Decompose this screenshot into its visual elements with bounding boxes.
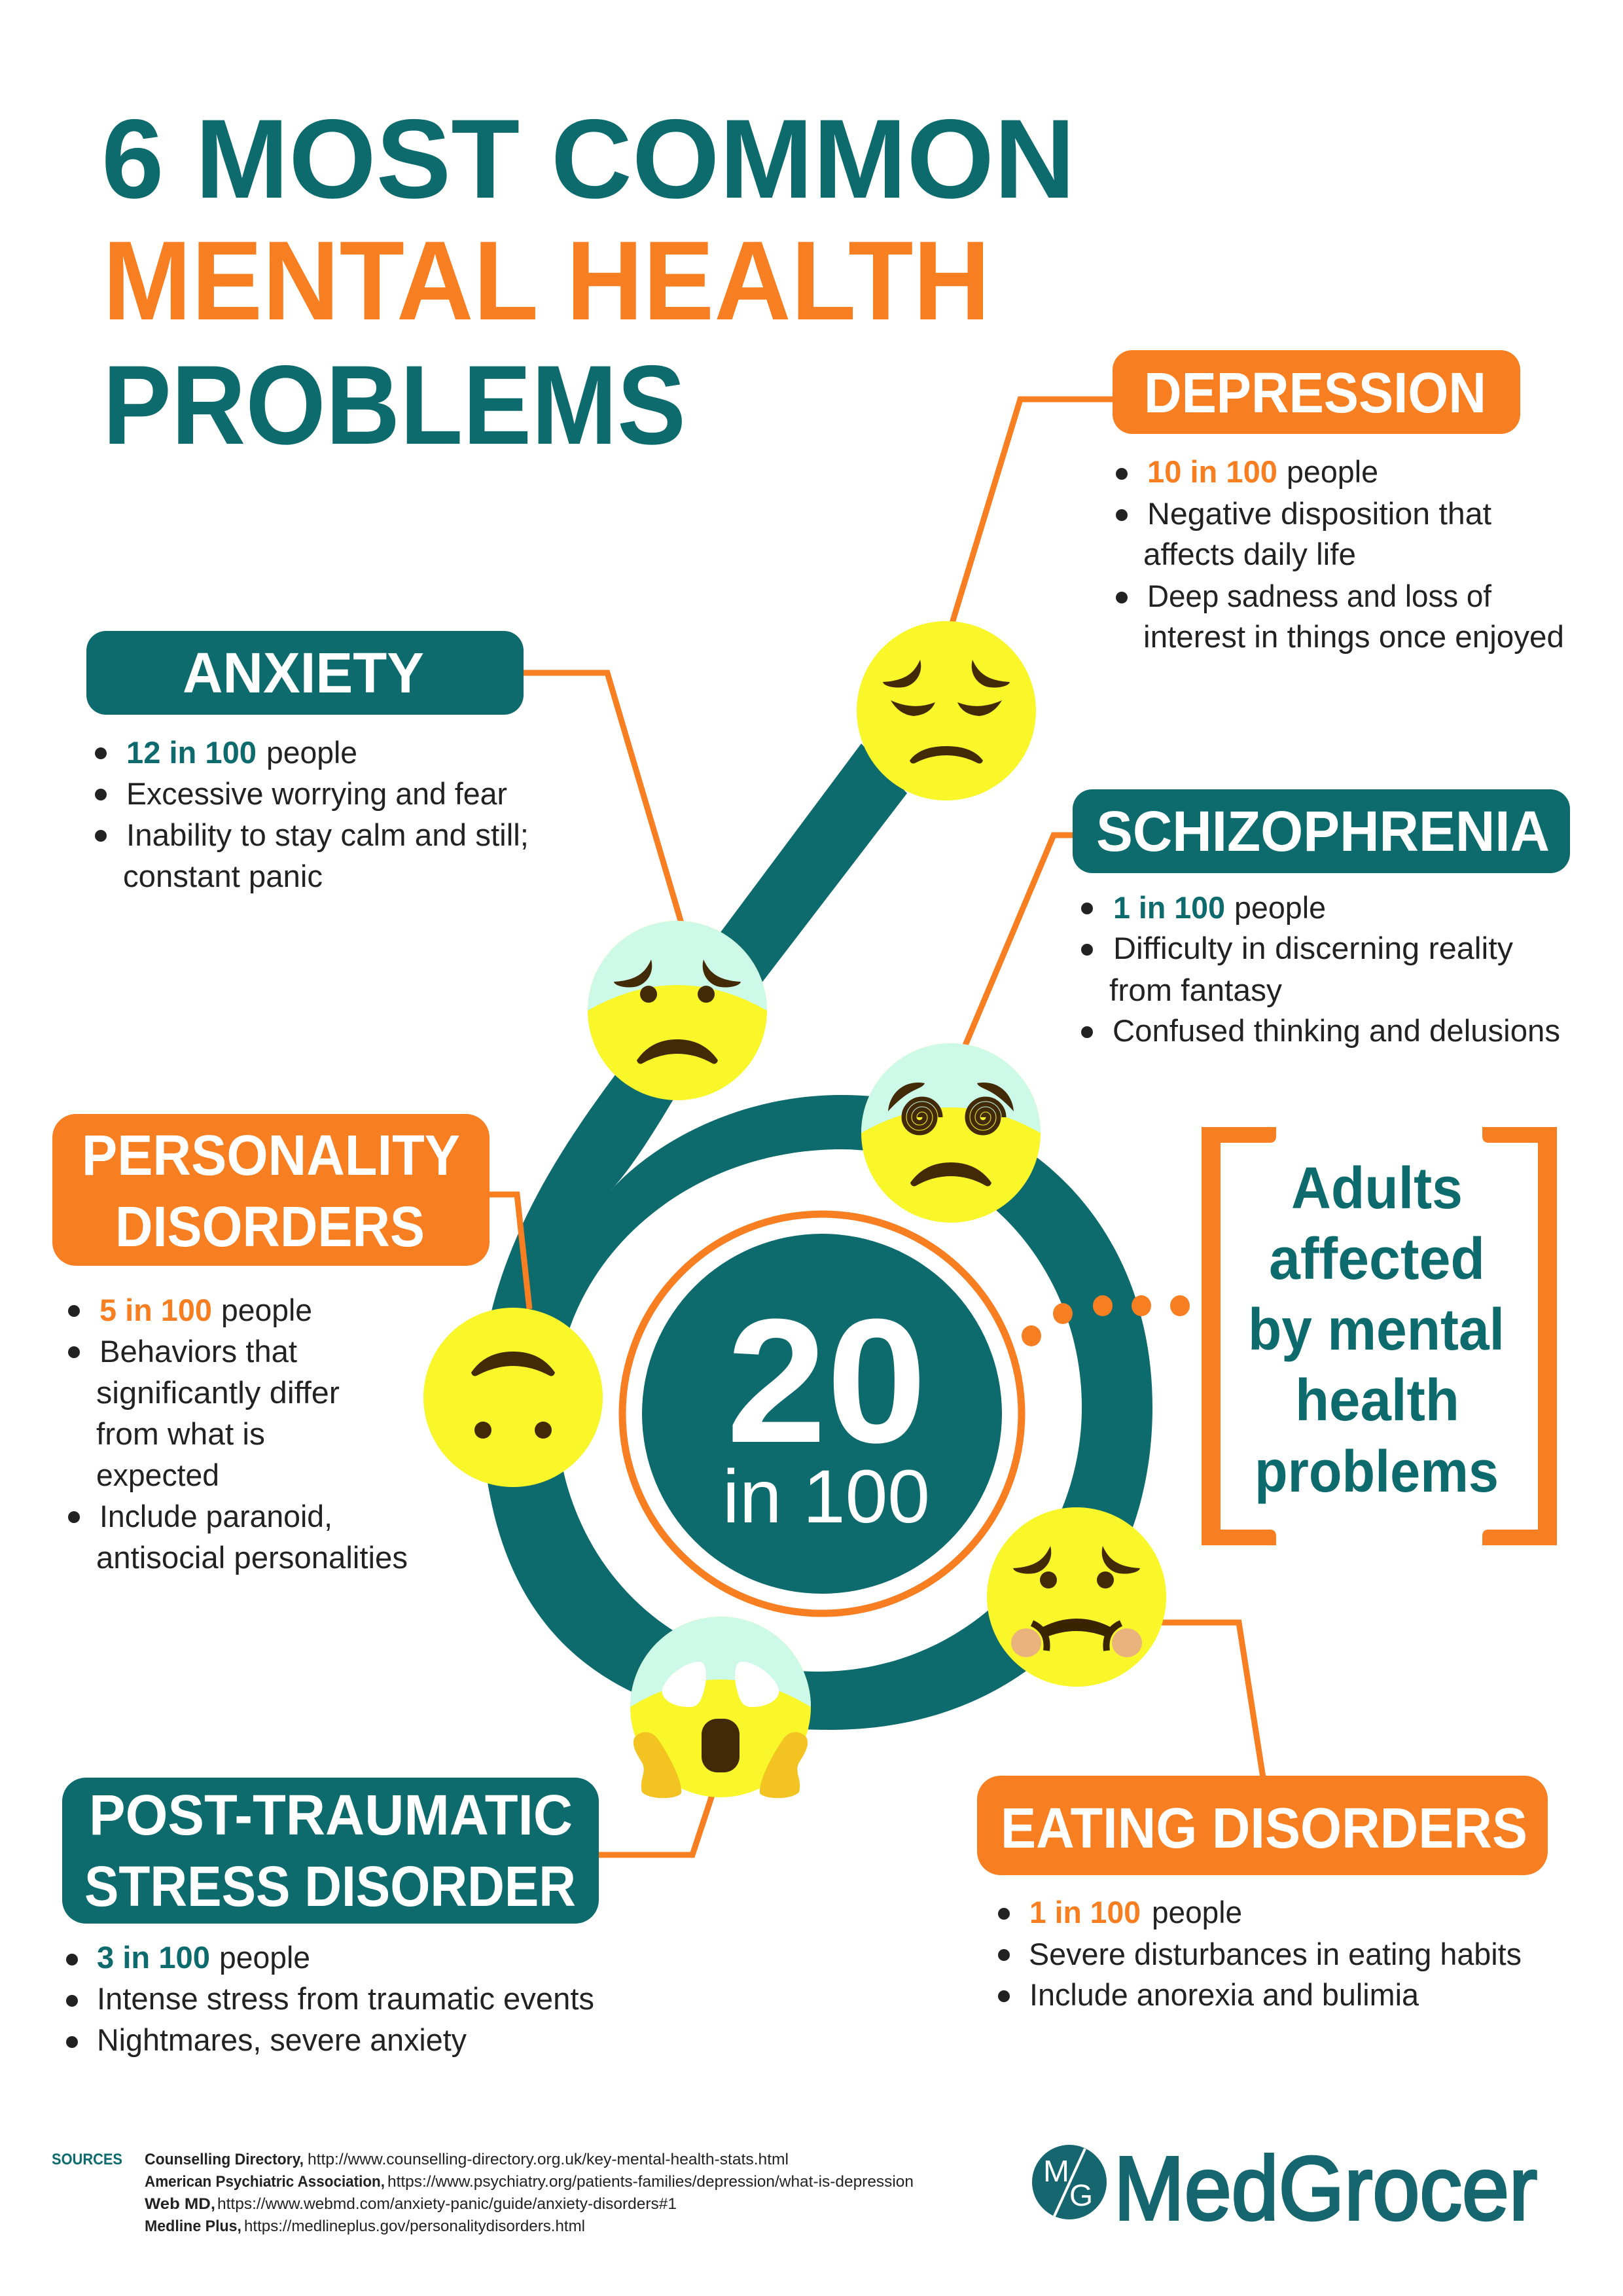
connector: depression: [952, 399, 1119, 625]
sources: American Psychiatric Association,: [145, 2173, 385, 2191]
icon: personality disorders face: [423, 1308, 603, 1487]
text: depression facts: people: [1287, 454, 1378, 489]
text: eating disorders facts: Include anorexia and bulimia: [1029, 1977, 1419, 2012]
icon: post-traumatic stress face: [630, 1617, 811, 1798]
heading: personality disorders: DISORDERS: [115, 1195, 425, 1259]
connector: personality disorders: [488, 1194, 529, 1309]
text: anxiety facts: Excessive worrying and fear: [126, 776, 507, 811]
heading: anxiety: [86, 631, 524, 715]
text: eating disorders facts: people: [1152, 1895, 1242, 1929]
central ring with tail: [481, 744, 1152, 1730]
text: anxiety facts: 12 in 100: [126, 735, 257, 770]
callout: adults affected: affected: [1269, 1227, 1485, 1292]
central stat: in 100: [722, 1455, 930, 1539]
connector: anxiety: [524, 673, 681, 923]
heading: eating disorders: EATING DISORDERS: [1001, 1797, 1527, 1860]
icon: eating disorders face: [987, 1507, 1166, 1687]
title: MENTAL HEALTH: [103, 218, 990, 344]
sources: Medline Plus,: [145, 2217, 241, 2235]
text: schizophrenia facts: [1081, 890, 1560, 1048]
dotted leader: [1022, 1295, 1190, 1346]
text: post-traumatic stress facts: 3 in 100: [97, 1940, 210, 1975]
callout: adults affected: Adults: [1291, 1156, 1463, 1221]
sources: https://www.webmd.com/anxiety-panic/guide/anxiety-disorders#1: [217, 2195, 677, 2213]
sources: Counselling Directory,: [145, 2151, 304, 2168]
logo: MedGrocer: M: [1043, 2154, 1069, 2188]
heading: post-traumatic stress disorder: POST-TRAUMATIC: [89, 1784, 573, 1847]
text: personality disorders facts: expected: [96, 1458, 219, 1492]
text: post-traumatic stress facts: Nightmares, severe anxiety: [97, 2022, 467, 2057]
callout: adults affected: health: [1295, 1368, 1459, 1433]
title: [101, 96, 1075, 468]
text: schizophrenia facts: from fantasy: [1109, 973, 1283, 1007]
text: personality disorders facts: people: [221, 1293, 312, 1327]
heading: personality disorders: PERSONALITY: [82, 1124, 460, 1187]
panel: depression: [1113, 350, 1564, 654]
icon: schizophrenia face: [861, 1043, 1041, 1223]
text: depression facts: Deep sadness and loss of: [1147, 579, 1492, 613]
heading: depression: DEPRESSION: [1144, 361, 1486, 425]
connector: schizophrenia: [965, 835, 1073, 1045]
callout: adults affected: problems: [1255, 1439, 1499, 1505]
central stat: 20: [726, 1283, 927, 1480]
panel: personality disorders: [52, 1114, 490, 1575]
text: eating disorders facts: [998, 1895, 1522, 2012]
text: post-traumatic stress facts: [66, 1940, 594, 2057]
text: depression facts: 10 in 100: [1147, 454, 1277, 489]
text: personality disorders facts: from what is: [96, 1416, 265, 1451]
text: personality disorders facts: significantly differ: [96, 1375, 340, 1410]
text: schizophrenia facts: people: [1234, 890, 1326, 925]
text: schizophrenia facts: Difficulty in discerning reality: [1113, 931, 1514, 965]
text: post-traumatic stress facts: people: [219, 1940, 310, 1975]
sources: Web MD,: [145, 2195, 215, 2213]
central stat: [622, 1214, 1022, 1613]
text: schizophrenia facts: Confused thinking and delusions: [1113, 1013, 1560, 1048]
title: 6 MOST COMMON: [101, 96, 1075, 222]
heading: depression: [1113, 350, 1520, 434]
sources: https://www.psychiatry.org/patients-families/depression/what-is-depression: [387, 2173, 914, 2191]
sources: http://www.counselling-directory.org.uk/key-mental-health-stats.html: [308, 2151, 789, 2168]
text: personality disorders facts: antisocial personalities: [96, 1540, 408, 1575]
heading: schizophrenia: SCHIZOPHRENIA: [1096, 800, 1550, 863]
logo: MedGrocer: G: [1069, 2178, 1093, 2212]
sources: https://medlineplus.gov/personalitydisorders.html: [244, 2217, 585, 2235]
text: personality disorders facts: 5 in 100: [99, 1293, 212, 1327]
text: personality disorders facts: [68, 1293, 408, 1575]
text: personality disorders facts: Behaviors that: [99, 1334, 297, 1369]
callout: adults affected: by mental: [1248, 1297, 1505, 1363]
text: schizophrenia facts: 1 in 100: [1113, 890, 1225, 925]
panel: schizophrenia: [1073, 789, 1570, 1048]
sources: [52, 2151, 914, 2235]
text: depression facts: [1116, 454, 1564, 654]
text: post-traumatic stress facts: Intense stress from traumatic events: [97, 1981, 594, 2016]
heading: personality disorders: [52, 1114, 490, 1266]
panel: eating disorders: [977, 1776, 1548, 2012]
heading: post-traumatic stress disorder: STRESS DISORDER: [84, 1855, 576, 1918]
text: anxiety facts: Inability to stay calm and still;: [126, 817, 529, 852]
connector: post-traumatic stress disorder: [597, 1793, 713, 1855]
logo: MedGrocer: MedGrocer: [1114, 2138, 1537, 2239]
heading: anxiety: ANXIETY: [183, 641, 424, 705]
heading: post-traumatic stress disorder: [62, 1778, 599, 1924]
text: depression facts: interest in things once enjoyed: [1143, 619, 1564, 654]
panel: post-traumatic stress disorder: [62, 1778, 599, 2057]
text: personality disorders facts: Include paranoid,: [99, 1499, 332, 1534]
heading: eating disorders: [977, 1776, 1548, 1875]
text: anxiety facts: constant panic: [123, 859, 323, 893]
text: depression facts: affects daily life: [1143, 537, 1356, 571]
text: eating disorders facts: 1 in 100: [1029, 1895, 1141, 1929]
icon: anxiety face: [588, 921, 767, 1100]
panel: anxiety: [86, 631, 529, 893]
text: anxiety facts: [95, 735, 529, 893]
callout: adults affected: [1202, 1127, 1557, 1545]
connector: eating disorders: [1162, 1623, 1263, 1778]
title: PROBLEMS: [103, 342, 686, 468]
text: anxiety facts: people: [266, 735, 357, 770]
text: depression facts: Negative disposition that: [1147, 496, 1491, 531]
sources: SOURCES: [52, 2151, 122, 2168]
text: eating disorders facts: Severe disturbances in eating habits: [1029, 1937, 1522, 1971]
icon: depression face: [857, 621, 1036, 800]
